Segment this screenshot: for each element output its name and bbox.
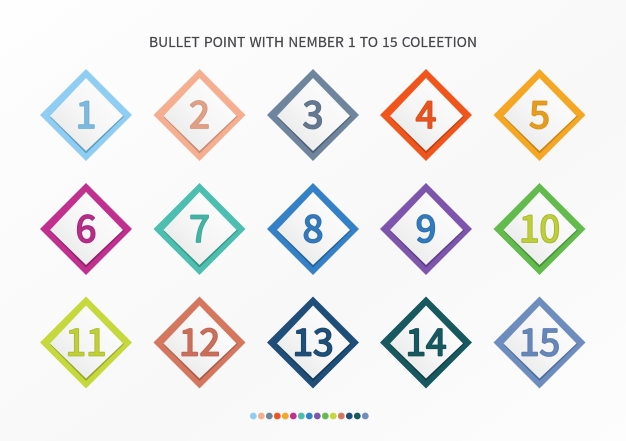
bullet 1: [40, 69, 132, 161]
bullet 10: 10: [519, 199, 560, 253]
bullet 8: [267, 183, 359, 275]
bullet 13: 13: [292, 312, 334, 366]
bullet 10: [494, 183, 586, 275]
bullet 12: 12: [179, 312, 220, 366]
bullet 7: 7: [189, 199, 210, 253]
bullet 6: 6: [76, 199, 96, 253]
bullet 6: [40, 183, 132, 275]
bullet 14: 14: [405, 312, 447, 366]
bullet 14: [380, 296, 472, 388]
bullet 3: 3: [303, 85, 323, 139]
bullet 15: [494, 296, 586, 388]
bullet 8: 8: [303, 199, 323, 253]
bullet 11: 11: [65, 312, 107, 366]
bullet 12: [154, 296, 246, 388]
bullet 15: 15: [519, 312, 560, 366]
bullet 2: [154, 69, 246, 161]
bullet 13: [267, 296, 359, 388]
bullet 5: 5: [529, 85, 550, 139]
bullet 9: 9: [416, 199, 436, 253]
bullet 2: 2: [189, 85, 210, 139]
bullet 9: [380, 183, 472, 275]
bullet 4: [380, 69, 472, 161]
bullet 3: [267, 69, 359, 161]
bullet 5: [494, 69, 586, 161]
bullet 7: [154, 183, 246, 275]
bullet 1: 1: [76, 85, 96, 139]
bullet 11: [40, 296, 132, 388]
bullet 4: 4: [416, 85, 436, 139]
title: BULLET POINT WITH NEMBER 1 TO 15 COLEETION: [149, 31, 477, 51]
colour swatch row: [250, 413, 369, 419]
